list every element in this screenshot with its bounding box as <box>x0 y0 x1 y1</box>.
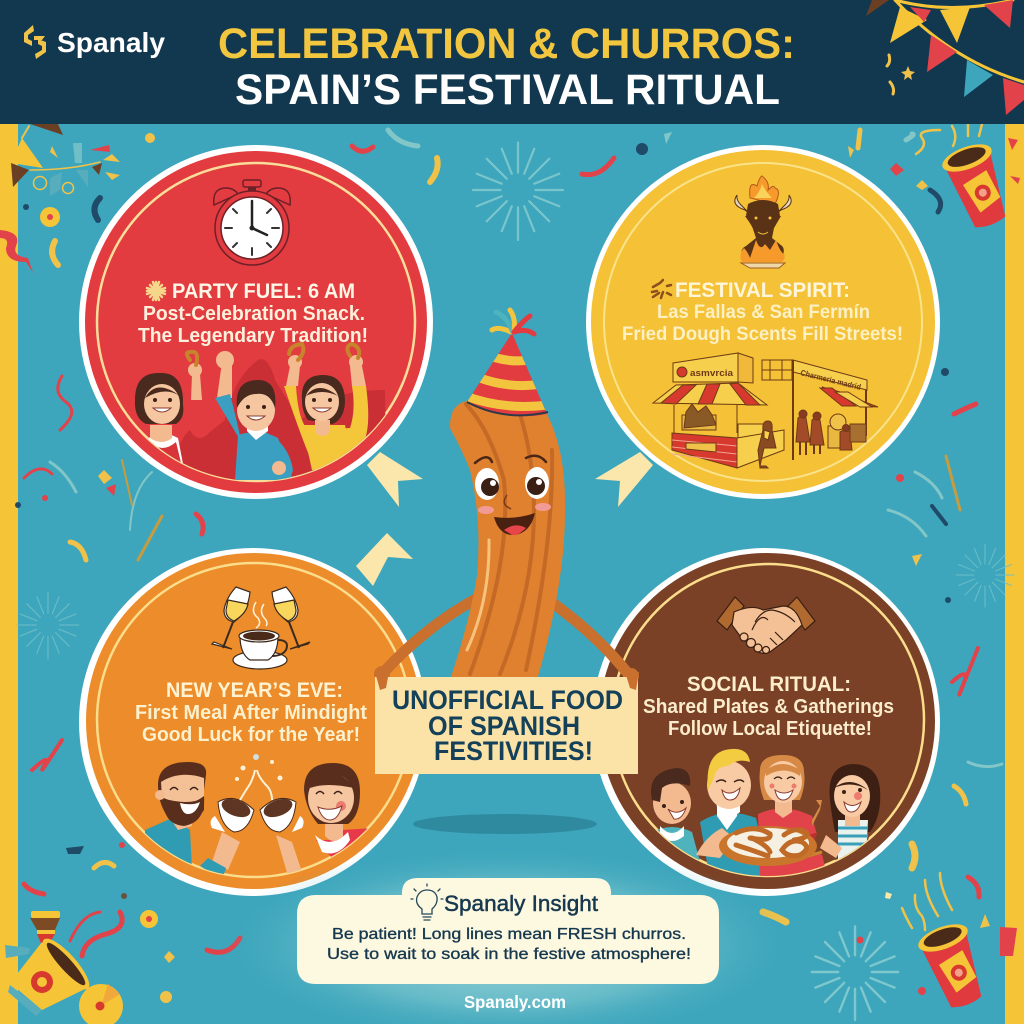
heading: NEW YEAR’S EVE: <box>166 679 343 702</box>
party hat <box>466 308 548 416</box>
people cheering <box>134 342 386 480</box>
header band <box>0 0 1024 124</box>
flower: small <box>140 910 158 928</box>
insight text <box>327 926 691 963</box>
icon: Spanaly logo <box>24 25 46 59</box>
steam: top right cup <box>916 124 982 154</box>
body text: Good Luck for the Year! <box>142 724 360 746</box>
body text: Las Fallas & San Fermín <box>657 301 870 323</box>
title line 1: CELEBRATION & CHURROS: <box>218 20 795 68</box>
festival stalls: Charmeria madrid <box>800 368 862 392</box>
body text: Shared Plates & Gatherings <box>643 696 894 718</box>
arrow ribbon: top right <box>595 452 653 507</box>
icon: sparkle <box>147 282 165 300</box>
churro mascot <box>374 310 639 684</box>
icon: handshake <box>717 597 815 654</box>
friends sharing churros <box>650 749 880 880</box>
body text <box>138 303 368 347</box>
fireworks: left <box>17 593 79 659</box>
cup: bottom left <box>5 911 96 1016</box>
banner text: OF SPANISH <box>428 711 580 741</box>
side border: left <box>0 124 18 1024</box>
insight heading: Spanaly Insight <box>444 891 598 916</box>
bunting: top left <box>11 124 120 227</box>
cup: bottom right <box>915 919 992 1014</box>
hands <box>374 666 639 684</box>
bunting: top right <box>866 0 1024 115</box>
body text: The Legendary Tradition! <box>138 325 368 347</box>
banner <box>375 672 639 774</box>
arm: left <box>382 600 474 674</box>
arrow ribbon: bottom left <box>356 533 413 586</box>
body text <box>135 702 367 746</box>
icon: light bulb <box>411 884 443 920</box>
festival stalls: asmvrcia <box>690 368 734 378</box>
hand tips <box>375 672 639 690</box>
title line 2: SPAIN’S FESTIVAL RITUAL <box>235 66 780 114</box>
body text: Post-Celebration Snack. <box>143 303 365 325</box>
cup: top right <box>939 139 1016 234</box>
banner text: UNOFFICIAL FOOD <box>392 685 623 715</box>
fireworks: bottom right <box>812 926 898 1020</box>
banner text <box>392 685 623 766</box>
body text: Follow Local Etiquette! <box>668 718 872 740</box>
panel: party fuel <box>79 145 433 500</box>
body text <box>643 696 894 740</box>
heading: FESTIVAL SPIRIT: <box>675 279 850 302</box>
steam: bottom right cup <box>902 873 952 930</box>
body text <box>622 301 903 345</box>
heading: PARTY FUEL: 6 AM <box>172 280 355 303</box>
glow behind insight <box>218 845 798 1024</box>
insight text: Use to wait to soak in the festive atmosphere! <box>327 946 691 963</box>
panel: social ritual <box>592 548 940 896</box>
mascot shadow <box>413 814 597 834</box>
insight box <box>297 878 719 984</box>
fireworks: top centre <box>473 142 563 240</box>
flower: bottom left <box>79 984 123 1024</box>
fireworks: right <box>956 545 1014 607</box>
logo wordmark: Spanaly <box>57 27 165 58</box>
arm: right <box>554 604 630 676</box>
icon: bull with flames <box>735 176 791 268</box>
body ridges <box>466 404 552 674</box>
icon: alarm clock <box>214 180 290 265</box>
footer url: Spanaly.com <box>464 992 566 1012</box>
friends toasting coffee <box>145 754 380 880</box>
icon: sparkle <box>652 280 671 298</box>
side border: right <box>1005 124 1024 1024</box>
panel: new year's eve <box>79 548 427 896</box>
icon: champagne and coffee <box>212 587 310 669</box>
body text: Fried Dough Scents Fill Streets! <box>622 323 903 345</box>
face <box>475 456 551 535</box>
arrow ribbon: top left <box>367 452 423 507</box>
insight text: Be patient! Long lines mean FRESH churros. <box>332 926 686 943</box>
panel: festival spirit <box>586 145 940 499</box>
banner text: FESTIVITIES! <box>434 736 593 766</box>
heading: SOCIAL RITUAL: <box>687 673 851 696</box>
body <box>450 401 565 680</box>
body text: First Meal After Mindight <box>135 702 367 724</box>
festival stalls <box>653 353 878 468</box>
